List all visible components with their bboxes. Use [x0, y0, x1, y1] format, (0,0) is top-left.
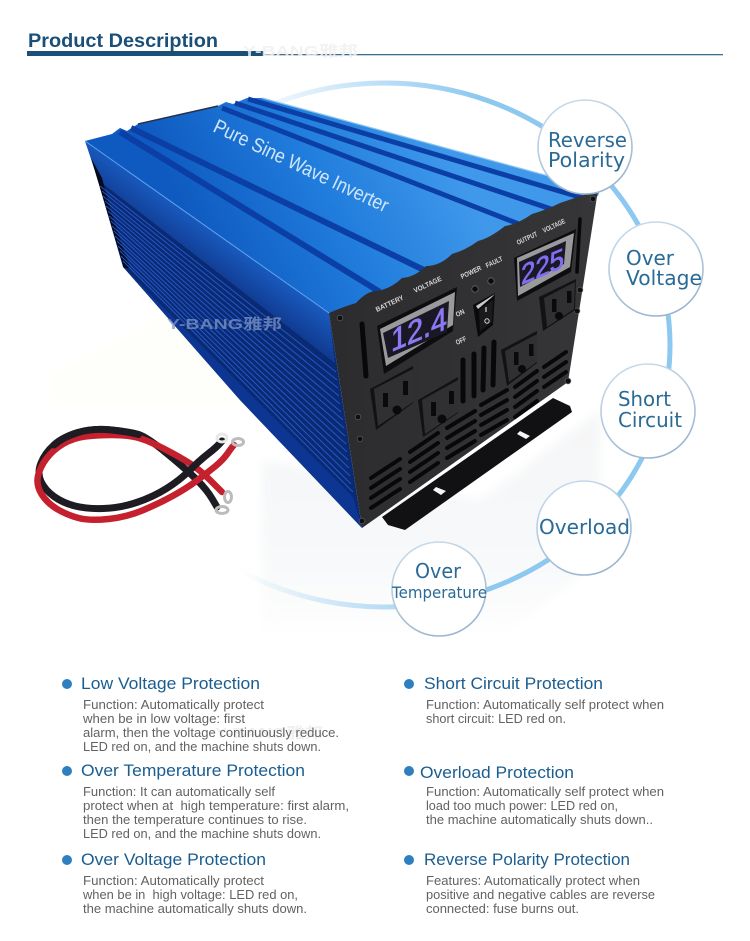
top face [85, 98, 600, 313]
output voltage display: 225 [521, 243, 564, 292]
mounting bracket [382, 398, 572, 530]
block: Over Temperature Protection: Function: It can automatically self [83, 784, 275, 799]
outlet 2 [418, 377, 458, 437]
block: Overload Protection: the machine automatically shuts down.. [426, 812, 653, 827]
protection ring [100, 83, 670, 607]
black cable [39, 429, 222, 509]
outlet 3 [501, 331, 537, 386]
callout: Short Circuit: Circuit [618, 408, 682, 432]
callout: Over Temperature: Temperature [391, 583, 487, 602]
block: Over Voltage Protection: the machine automatically shuts down. [83, 901, 307, 916]
block: Reverse Polarity Protection: Reverse Polarity Protection [424, 850, 630, 869]
block: Short Circuit Protection: short circuit: LED red on. [426, 711, 566, 726]
callout: Over Temperature: Over [415, 559, 462, 583]
cable lugs [216, 434, 244, 514]
header watermark: Y-BANG雅邦 [243, 43, 358, 60]
block: Short Circuit Protection: Function: Automatically self protect when [426, 697, 664, 712]
side watermark: Y-BANG雅邦 [167, 316, 282, 333]
block: Overload Protection: Overload Protection [420, 763, 574, 782]
panel labels: FAULT [485, 256, 505, 270]
callout: Over Voltage: Over [626, 246, 675, 270]
block: Over Temperature Protection [62, 761, 349, 841]
callout: Over Temperature [391, 542, 487, 636]
panel labels: VOLTAGE [542, 218, 567, 235]
battery voltage display: 12.4 [391, 301, 447, 360]
outlet 1 [370, 366, 413, 430]
panel labels: OFF [455, 336, 468, 347]
callout: Over Voltage [609, 222, 703, 316]
vent grilles [371, 352, 566, 508]
block: Over Temperature Protection: Over Temperature Protection [81, 761, 305, 780]
block: Over Temperature Protection: then the temperature continues to rise. [83, 812, 307, 827]
callout: Reverse Polarity [538, 100, 632, 194]
callout: Short Circuit: Short [618, 387, 671, 411]
block: Overload Protection [404, 763, 664, 827]
panel labels: BATTERY [375, 295, 405, 314]
callout: Short Circuit [601, 364, 695, 458]
block: Short Circuit Protection [404, 674, 664, 726]
block: Over Voltage Protection [62, 850, 307, 916]
block: Reverse Polarity Protection: positive and negative cables are reverse [426, 887, 655, 902]
battery voltage display [377, 287, 457, 374]
callout: Reverse Polarity: Polarity [548, 148, 625, 172]
block: Overload Protection: load too much power: LED red on, [426, 798, 618, 813]
block: Over Voltage Protection: Function: Automatically protect [83, 873, 264, 888]
red cable [37, 435, 234, 520]
panel labels: POWER [460, 265, 483, 281]
background reflection [50, 312, 600, 640]
block: Reverse Polarity Protection: connected: fuse burns out. [426, 901, 579, 916]
block: Overload Protection: Function: Automatically self protect when [426, 784, 664, 799]
block: Over Temperature Protection: LED red on, and the machine shuts down. [83, 826, 321, 841]
AC outlets [370, 279, 576, 437]
block: Low Voltage Protection: LED red on, and the machine shuts down. [83, 739, 321, 754]
panel labels: VOLTAGE [413, 276, 443, 295]
block: Over Temperature Protection: protect when at high temperature: first alarm, [83, 798, 349, 813]
callout: Overload: Overload [539, 515, 630, 539]
callout: Reverse Polarity: Reverse [548, 128, 627, 152]
callout: Over Voltage: Voltage [626, 266, 702, 290]
block: Low Voltage Protection: Function: Automatically protect [83, 697, 264, 712]
panel slits [362, 219, 580, 401]
text watermark: Y-BANG雅邦 [215, 725, 323, 742]
header rule [27, 51, 723, 56]
block: Low Voltage Protection: Low Voltage Protection [81, 674, 260, 693]
bolts [337, 196, 596, 524]
block: Short Circuit Protection: Short Circuit Protection [424, 674, 603, 693]
outlet 4 [539, 279, 576, 331]
battery cables [37, 429, 243, 520]
block: Low Voltage Protection: when be in low voltage: first [82, 711, 245, 726]
side face [85, 141, 362, 528]
panel labels: OUTPUT [516, 231, 539, 247]
output voltage display [514, 229, 576, 301]
panel labels: ON [455, 309, 466, 319]
block: Low Voltage Protection: alarm, then the voltage continuously reduce. [83, 725, 339, 740]
title: Product Description [28, 31, 218, 52]
block: Over Voltage Protection: when be in high voltage: LED red on, [82, 887, 298, 902]
block: Reverse Polarity Protection: Features: Automatically protect when [426, 873, 640, 888]
product name on lid: Pure Sine Wave Inverter [210, 116, 392, 217]
black cable front section [54, 429, 222, 470]
block: Over Voltage Protection: Over Voltage Protection [81, 850, 266, 869]
panel labels [375, 218, 567, 347]
inverter product illustration [85, 98, 600, 530]
callout: Overload [537, 481, 631, 575]
block: Low Voltage Protection [62, 674, 339, 754]
front panel [329, 190, 598, 528]
block: Reverse Polarity Protection [404, 850, 655, 916]
power switch and LEDs [472, 278, 495, 337]
